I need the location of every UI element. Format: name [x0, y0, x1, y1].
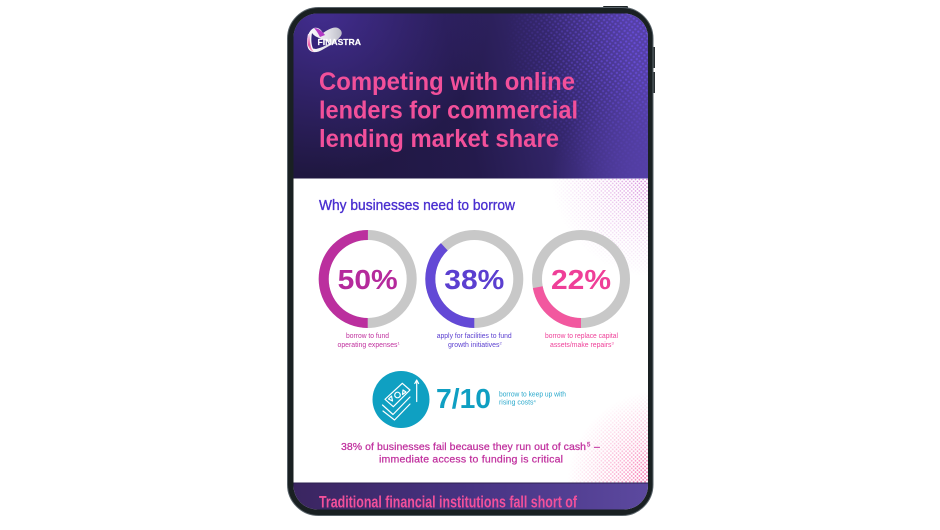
caption: rising costs: 4 [534, 398, 536, 404]
caption: rising costs: borrow to keep up with [499, 392, 566, 399]
callout: out of cash: 38% of businesses fail because they run out of cash [341, 441, 586, 453]
heading: traditional financial institutions: Traditional financial institutions fall short of [319, 492, 577, 512]
panel: header banner [293, 13, 649, 178]
donut chart: 38% [430, 235, 518, 323]
caption: 38%: 2 [500, 340, 502, 346]
logo: Finastra: FINASTRA [318, 37, 361, 47]
caption: rising costs [499, 392, 566, 407]
logo: Finastra [307, 27, 361, 52]
caption: 38% [437, 333, 512, 349]
caption: 22% [545, 333, 618, 349]
callout: out of cash: – [594, 441, 600, 453]
panel: white content background dots [559, 178, 648, 482]
caption: 38%: growth initiatives [448, 342, 500, 349]
caption: 22%: 3 [612, 340, 614, 346]
caption: 50%: 1 [398, 340, 400, 346]
donut chart: 50%: 50% [338, 264, 398, 295]
icon: money stack with up arrow [372, 371, 430, 428]
caption: 50%: operating expenses [338, 342, 398, 349]
donut chart: 22% [537, 235, 625, 323]
title: lenders for commercial [319, 96, 578, 124]
caption: 22%: assets/make repairs [550, 342, 612, 349]
panel: footer banner [293, 482, 649, 512]
caption: 38%: apply for facilities to fund [437, 333, 512, 340]
callout: out of cash [341, 441, 600, 466]
title [319, 68, 578, 153]
callout: out of cash: immediate access to funding is critical [379, 454, 563, 466]
callout: out of cash: 5 [587, 442, 591, 448]
title: lending market share [319, 125, 559, 153]
device: tablet frame [288, 6, 655, 516]
title: Competing with online [319, 68, 575, 96]
caption: 50% [338, 333, 400, 349]
caption: rising costs: rising costs [499, 400, 534, 407]
caption: 50%: borrow to fund [346, 333, 389, 340]
caption: 22%: borrow to replace capital [545, 333, 618, 340]
donut chart: 22%: 22% [551, 264, 611, 295]
heading: why businesses need to borrow: Why businesses need to borrow [319, 198, 516, 214]
stat: 7/10: 7/10 [436, 383, 491, 414]
donut chart: 50% [324, 235, 412, 323]
donut chart: 38%: 38% [444, 264, 504, 295]
